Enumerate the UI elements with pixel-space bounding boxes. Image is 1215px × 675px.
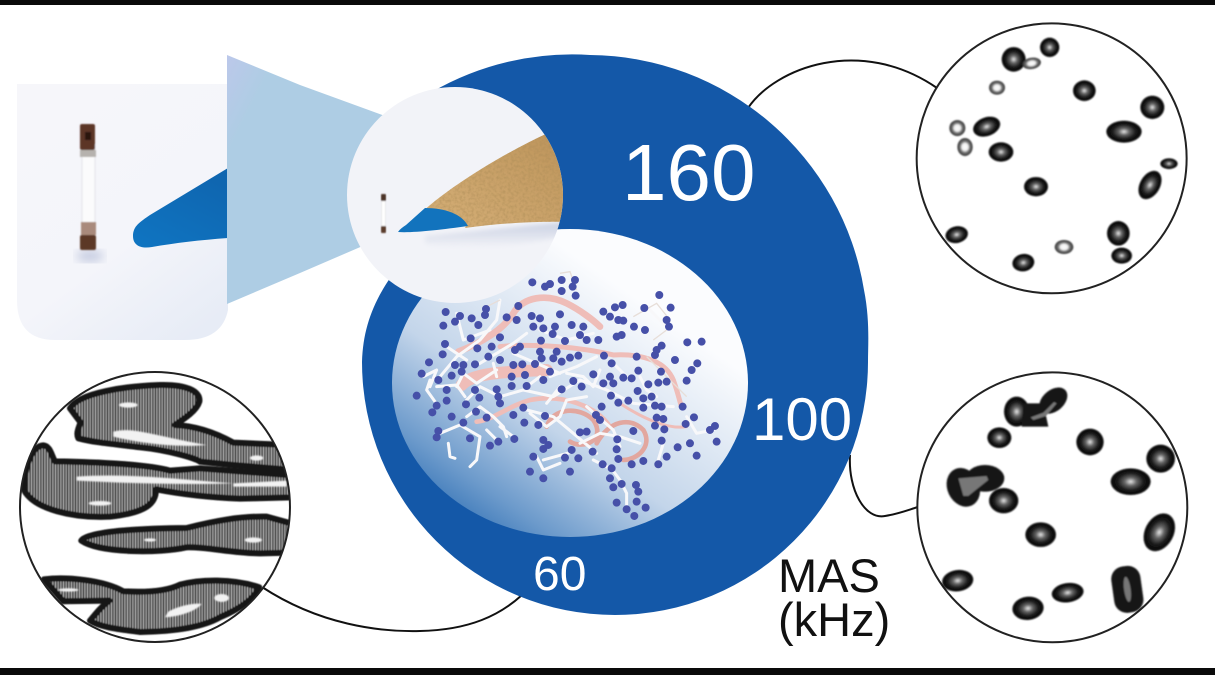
label: MAS (kHz): MAS: [778, 549, 880, 602]
top border bar: [0, 0, 1215, 5]
shadow under pencil: [426, 222, 560, 242]
panel: photo of rotor and pencil tip: [17, 84, 228, 340]
magnification wedge: [227, 55, 385, 304]
sticks: [423, 300, 713, 507]
icon: pencil blue tip: [398, 208, 468, 232]
ribbons: [458, 298, 687, 460]
chart: 60 kHz broad contour spectrum: [20, 372, 293, 642]
chart: 100 kHz intermediate peak spectrum: [917, 372, 1187, 642]
label: MAS (kHz): (kHz): [778, 593, 890, 646]
label: 60 kHz: 60: [533, 548, 586, 601]
chart: 160 kHz sharp peak spectrum: [917, 23, 1187, 293]
icon: sample rotor: [80, 124, 96, 250]
connector: 160 kHz to spectrum: [748, 60, 937, 108]
white contour centres: [119, 402, 138, 408]
icon: blue pencil tip enlarged: [133, 168, 228, 248]
label: 160 kHz: 160: [622, 128, 755, 217]
label: 100 kHz: 100: [752, 386, 852, 453]
connector: 100 kHz to spectrum: [850, 455, 918, 516]
connector: 60 kHz to spectrum: [262, 587, 522, 631]
chart: protein structure model: [417, 272, 717, 516]
icon: small rotor: [381, 194, 386, 233]
icon: rotor shadow: [76, 250, 104, 262]
atoms: [417, 280, 717, 516]
panel: blue MAS frequency disc: [362, 54, 868, 615]
peak cluster left: [940, 462, 1004, 512]
panel: protein sphere: [392, 229, 748, 537]
bottom border bar: [0, 668, 1215, 675]
peak cluster top: [1004, 382, 1072, 427]
panel: magnified pencil and rotor circle: [347, 87, 568, 303]
icon: pencil wood: [426, 134, 563, 228]
